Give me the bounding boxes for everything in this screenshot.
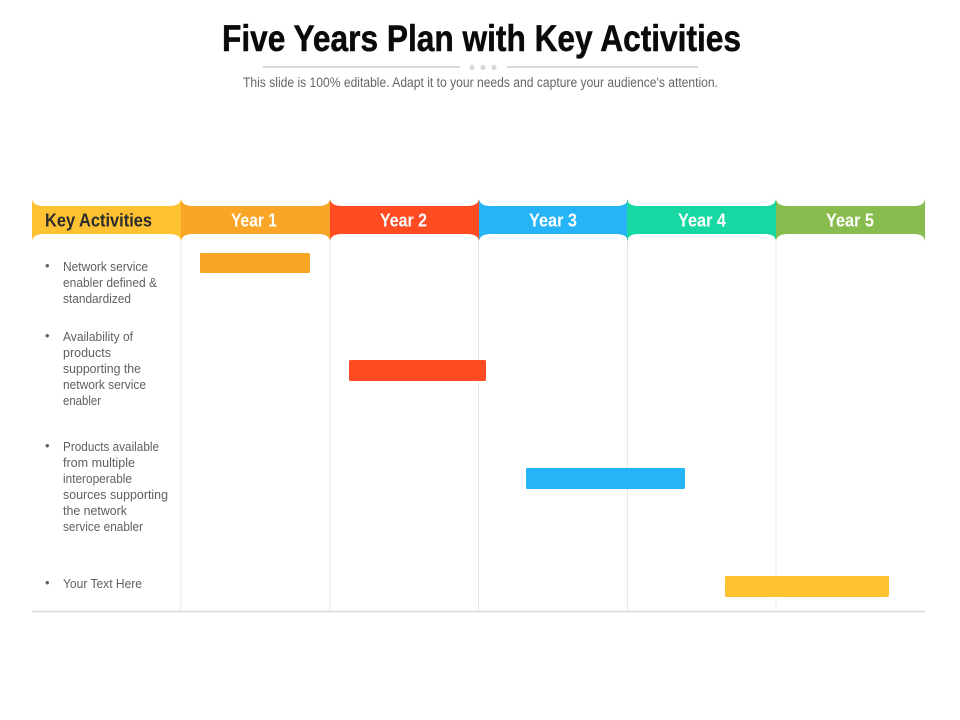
gantt bar: year 1	[200, 253, 310, 273]
header: year 3: Year 3	[529, 210, 577, 230]
activity 3 text: •	[45, 438, 50, 453]
activity 2 text	[45, 328, 146, 408]
activity 3 text: from multiple	[63, 455, 135, 470]
activity 2 text: enabler	[63, 393, 102, 408]
activity 1 text: •	[45, 258, 50, 273]
header: year 1	[181, 199, 330, 241]
activity 3 text: the network	[63, 503, 127, 518]
gantt bar: year 3 to 4	[526, 468, 685, 489]
header: year 5: Year 5	[826, 210, 874, 230]
activity 1 text: Network service	[63, 259, 148, 274]
activity 2 text: products	[63, 345, 111, 360]
gantt bar: year 4 to 5	[725, 576, 889, 597]
header: year 4	[627, 199, 776, 241]
header: key activities: Key Activities	[45, 210, 152, 230]
activity 3 text: Products available	[63, 439, 159, 454]
subtitle: This slide is 100% editable. Adapt it to your needs and capture your audience's attention.	[243, 75, 718, 90]
header: year 5	[776, 199, 925, 241]
activity 1 text	[45, 258, 157, 306]
title divider	[263, 65, 698, 70]
header: year 4: Year 4	[678, 210, 726, 230]
activity 1 text: standardized	[63, 291, 131, 306]
header: year 2	[330, 199, 479, 241]
activity 2 text: supporting the	[63, 361, 141, 376]
activity 3 text: interoperable	[63, 471, 132, 486]
header: year 2: Year 2	[380, 210, 427, 230]
header: key activities	[32, 199, 181, 241]
activity 2 text: Availability of	[63, 329, 133, 344]
activity 2 text: network service	[63, 377, 146, 392]
activity 4 text: Your Text Here	[63, 576, 142, 591]
activity 2 text: •	[45, 328, 50, 343]
grid lines	[181, 238, 776, 611]
activity 1 text: enabler defined &	[63, 275, 157, 290]
activity 3 text	[45, 438, 168, 534]
header: year 1: Year 1	[231, 210, 277, 230]
baseline	[32, 610, 925, 612]
activity 3 text: sources supporting	[63, 487, 168, 502]
activity 3 text: service enabler	[63, 519, 144, 534]
gantt bar: year 2	[349, 360, 486, 381]
activity 4 text: •	[45, 575, 50, 590]
header: year 3	[479, 199, 628, 241]
title: Five Years Plan with Key Activities	[222, 18, 741, 59]
